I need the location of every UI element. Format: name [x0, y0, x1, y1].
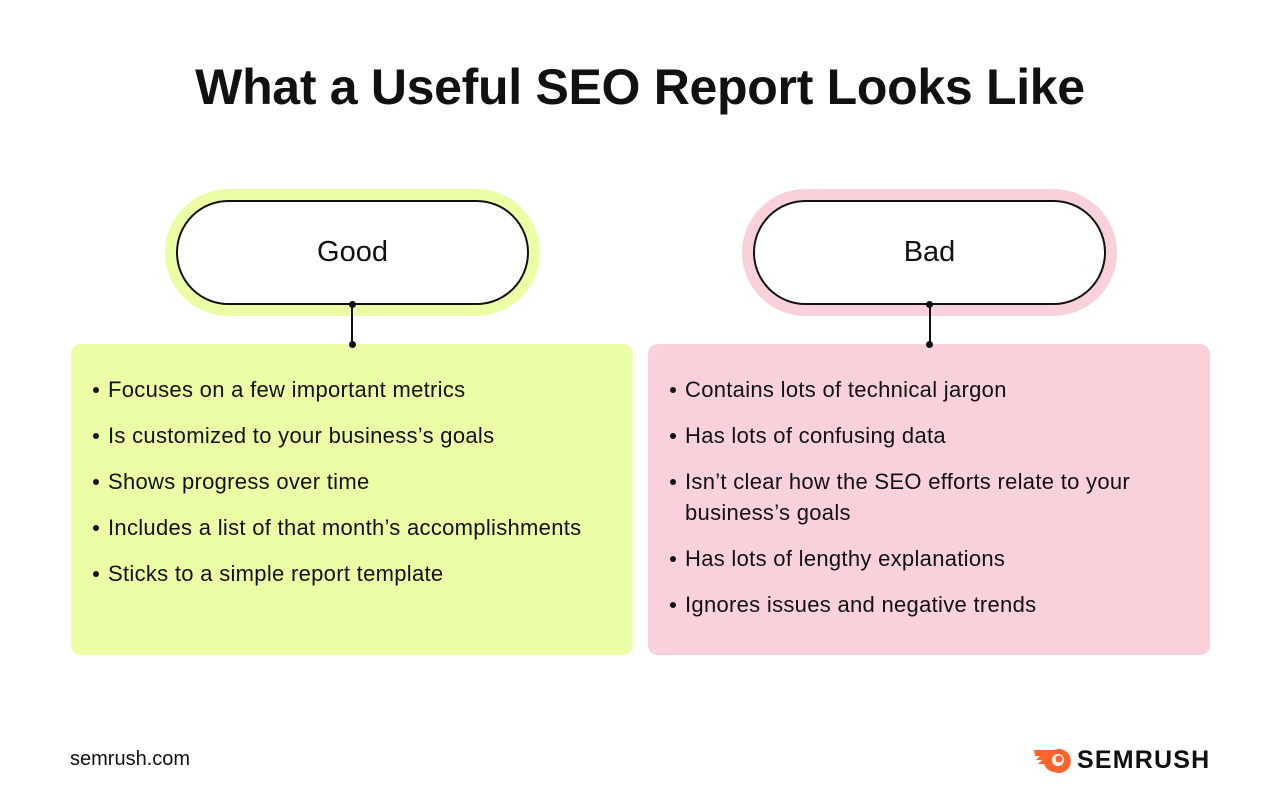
panel: good [71, 344, 633, 655]
title: What a Useful SEO Report Looks Like [195, 59, 1085, 115]
pill: Good: Good [317, 236, 388, 268]
panel: good: Is customized to your business’s goals [108, 423, 494, 448]
logo: SEMRUSH [1077, 746, 1210, 774]
connector: bad [929, 304, 931, 345]
panel: bad: Contains lots of technical jargon [685, 377, 1007, 402]
panel: bad: Ignores issues and negative trends [685, 592, 1036, 617]
panel: good: Sticks to a simple report template [108, 561, 443, 586]
connector: good [351, 304, 353, 345]
pill: Bad: Bad [904, 236, 955, 268]
pill: Good [165, 189, 540, 316]
footer url: semrush.com [70, 748, 190, 770]
panel: bad: Isn’t clear how the SEO efforts relate to your business’s goals [685, 469, 1130, 525]
pill: Bad [742, 189, 1117, 316]
panel: bad: Has lots of confusing data [685, 423, 946, 448]
panel: good: Shows progress over time [108, 469, 370, 494]
panel: good: Includes a list of that month’s accomplishments [108, 515, 581, 540]
panel: bad [648, 344, 1210, 655]
panel: good: Focuses on a few important metrics [108, 377, 465, 402]
panel: bad: Has lots of lengthy explanations [685, 546, 1005, 571]
